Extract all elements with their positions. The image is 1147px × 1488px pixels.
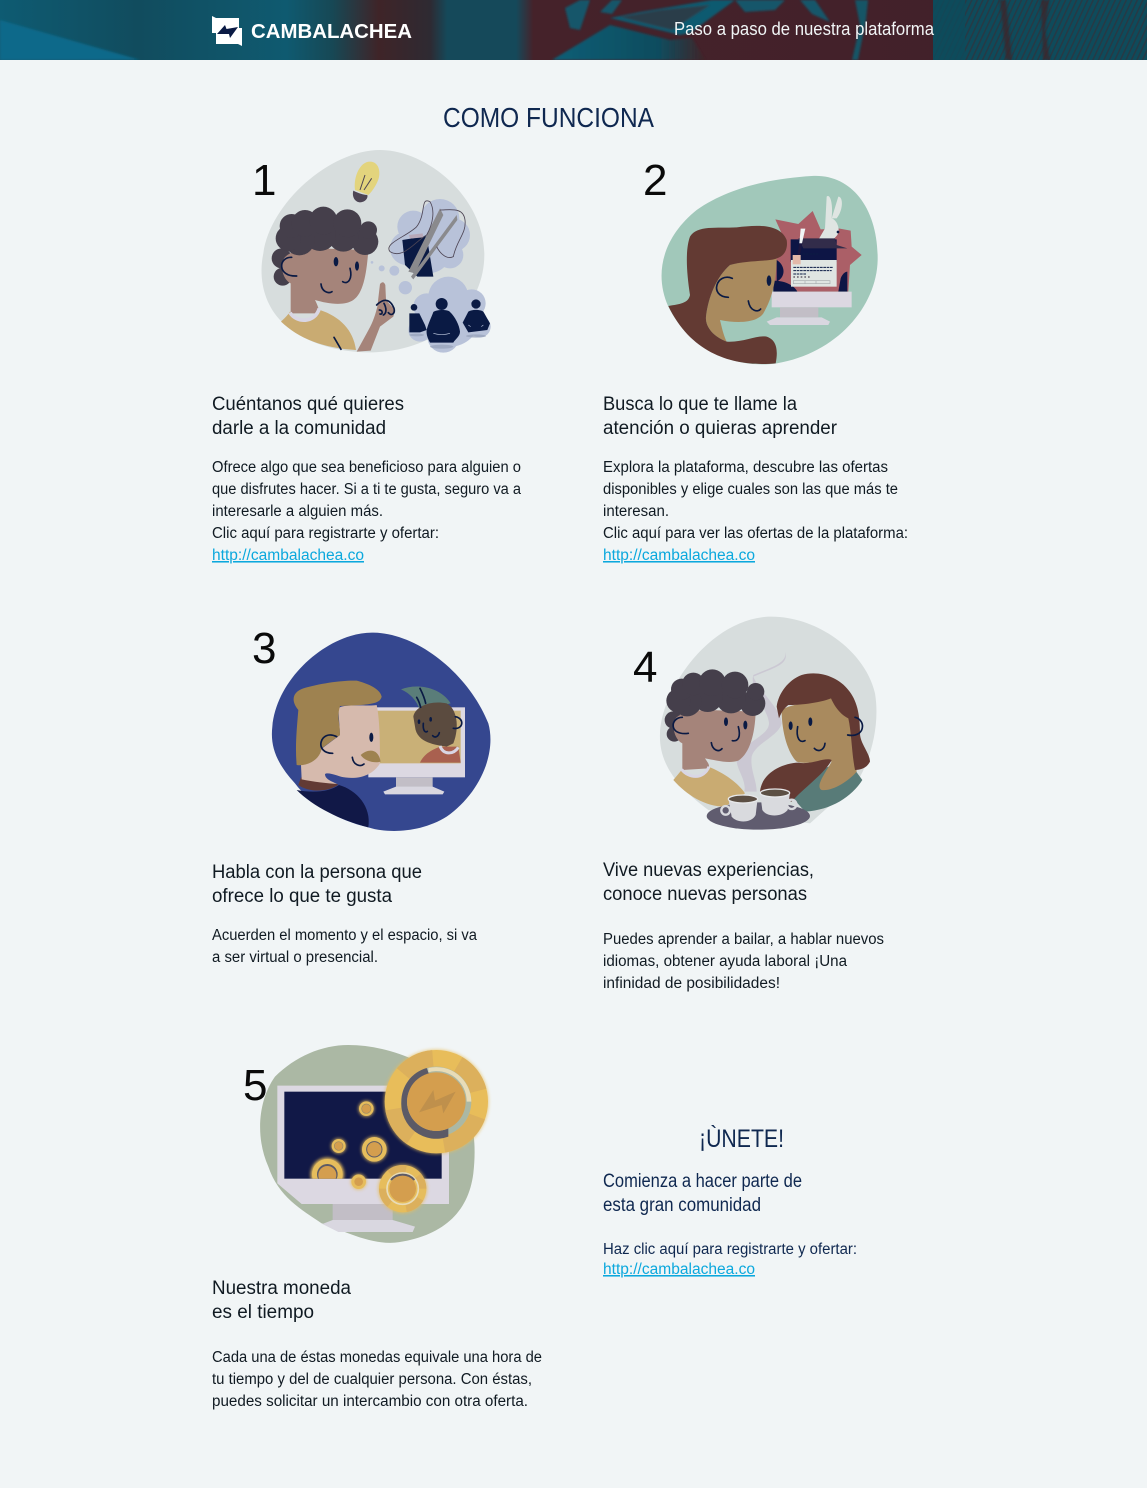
step 2 body text: http://cambalachea.co	[603, 547, 755, 564]
step 5 body text: Cada una de éstas monedas equivale una hora de	[212, 1349, 542, 1366]
step 1 heading	[212, 394, 404, 439]
step 2 heading	[603, 394, 838, 439]
join heading: ¡ÙNETE!	[699, 1124, 784, 1153]
step 1 heading: Cuéntanos qué quieres	[212, 394, 404, 415]
offer card	[791, 254, 837, 287]
logo icon	[212, 16, 242, 46]
step 4 heading: conoce nuevas personas	[603, 884, 807, 905]
panel: step 5	[212, 1045, 542, 1410]
number 5: 5	[243, 1061, 267, 1110]
step 2 heading: Busca lo que te llame la	[603, 394, 797, 415]
join link text	[603, 1241, 857, 1278]
join subheading	[603, 1171, 802, 1216]
header banner	[0, 0, 1147, 60]
step 4 heading	[603, 860, 814, 905]
icon: light bulb	[353, 162, 379, 202]
join link text: http://cambalachea.co	[603, 1261, 755, 1278]
step 3 body text: Acuerden el momento y el espacio, si va	[212, 927, 477, 944]
thought bubbles	[371, 261, 412, 294]
step 3 heading	[212, 862, 422, 907]
step 1 body text: http://cambalachea.co	[212, 547, 364, 564]
illustration: person with ideas	[262, 150, 491, 353]
steam	[737, 652, 786, 792]
tray and cups	[707, 789, 810, 830]
number 3: 3	[252, 624, 276, 673]
step 1 body text: Clic aquí para registrarte y ofertar:	[212, 525, 439, 542]
large coin with logo	[384, 1049, 489, 1154]
header tagline: Paso a paso de nuestra plataforma	[674, 19, 935, 39]
step 1 body text	[212, 459, 521, 564]
character: curly hair	[272, 207, 395, 352]
small coins	[311, 1101, 387, 1191]
step 1 heading: darle a la comunidad	[212, 418, 386, 439]
step 3 body text: a ser virtual o presencial.	[212, 949, 378, 966]
step 2 body text: interesan.	[603, 503, 669, 520]
logo	[212, 16, 412, 46]
panel: step 3	[212, 624, 490, 966]
monitor	[277, 1086, 449, 1232]
step 1 body text: Ofrece algo que sea beneficioso para alguien o	[212, 459, 521, 476]
illustration: time coins on monitor	[260, 1045, 489, 1243]
join subheading: esta gran comunidad	[603, 1195, 761, 1216]
panel: join call to action	[603, 1124, 857, 1278]
title: COMO FUNCIONA	[443, 102, 654, 133]
number 4: 4	[633, 643, 657, 692]
step 4 body text	[603, 931, 884, 992]
join link text: Haz clic aquí para registrarte y ofertar:	[603, 1241, 857, 1258]
step 5 heading	[212, 1278, 351, 1323]
step 4 body text: idiomas, obtener ayuda laboral ¡Una	[603, 953, 847, 970]
step 5 body text	[212, 1349, 542, 1410]
monitor	[767, 239, 852, 325]
illustration: video call	[272, 633, 490, 831]
character on screen	[401, 687, 462, 763]
character: long hair	[668, 226, 787, 364]
step 1 body text: interesarle a alguien más.	[212, 503, 383, 520]
number 1: 1	[252, 156, 276, 205]
illustration: person browsing offers	[662, 176, 878, 364]
coin lower right	[378, 1164, 427, 1213]
panel: step 4	[603, 617, 884, 992]
join subheading: Comienza a hacer parte de	[603, 1171, 802, 1192]
step 2 body text: Explora la plataforma, descubre las ofertas	[603, 459, 888, 476]
burst	[773, 211, 862, 292]
step 4 body text: infinidad de posibilidades!	[603, 975, 780, 992]
logo wordmark: CAMBALACHEA	[251, 21, 412, 43]
step 5 body text: tu tiempo y del de cualquier persona. Con éstas,	[212, 1371, 532, 1388]
character: curly hair	[665, 669, 765, 807]
step 3 heading: ofrece lo que te gusta	[212, 886, 392, 907]
step 5 body text: puedes solicitar un intercambio con otra oferta.	[212, 1393, 528, 1410]
step 1 body text: que disfrutes hacer. Si a ti te gusta, seguro va a	[212, 481, 521, 498]
step 5 heading: es el tiempo	[212, 1302, 314, 1323]
step 4 heading: Vive nuevas experiencias,	[603, 860, 814, 881]
monitor	[368, 707, 465, 794]
thought: community group	[408, 277, 491, 353]
step 5 heading: Nuestra moneda	[212, 1278, 351, 1299]
illustration: two people having coffee	[660, 617, 876, 830]
step 2 body text: disponibles y elige cuales son las que más te	[603, 481, 898, 498]
thought: needle and thread	[389, 199, 470, 279]
step 3 body text	[212, 927, 477, 966]
character: long hair	[760, 673, 870, 812]
panel: step 2	[603, 156, 908, 564]
step 2 body text	[603, 459, 908, 564]
step 2 body text: Clic aquí para ver las ofertas de la plataforma:	[603, 525, 908, 542]
number 2: 2	[643, 156, 667, 205]
panel: step 1	[212, 150, 521, 564]
magic hat and rabbit	[797, 196, 847, 255]
step 3 heading: Habla con la persona que	[212, 862, 422, 883]
character: blond man	[294, 681, 382, 827]
step 4 body text: Puedes aprender a bailar, a hablar nuevos	[603, 931, 884, 948]
step 2 heading: atención o quieras aprender	[603, 418, 838, 439]
